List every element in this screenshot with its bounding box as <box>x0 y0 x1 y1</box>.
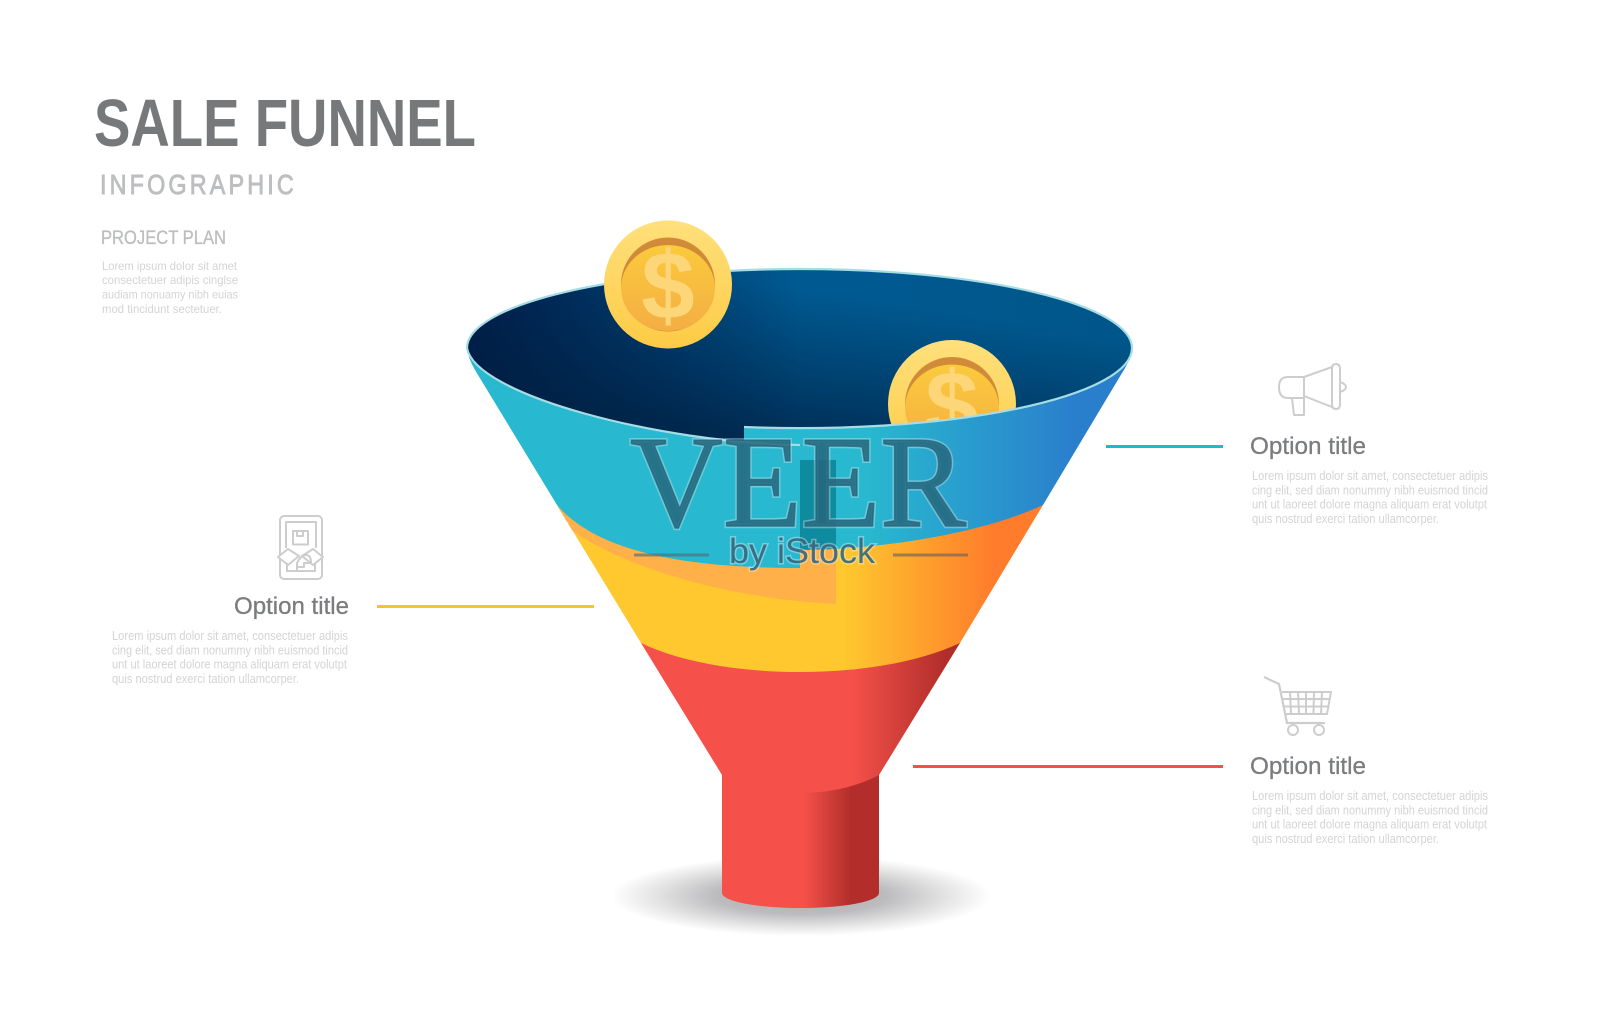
option block: left <box>112 593 349 686</box>
option body: quis nostrud exerci tation ullamcorper. <box>1252 832 1439 846</box>
icon: shopping cart <box>1264 677 1331 735</box>
option body <box>112 629 348 686</box>
option body: unt ut laoreet dolore magna aliquam erat volutpt <box>1252 498 1487 512</box>
funnel blue section left <box>467 348 800 568</box>
funnel blue section right <box>744 348 1132 550</box>
option block: bottom right <box>1250 753 1488 846</box>
funnel neck <box>722 775 879 908</box>
icon: coin above funnel: $ <box>641 232 695 340</box>
funnel interior <box>467 269 1132 445</box>
option body: Lorem ipsum dolor sit amet, consectetuer adipis <box>112 629 348 643</box>
watermark wordmark: VEER <box>630 410 967 555</box>
funnel <box>467 269 1132 908</box>
text block: project plan <box>101 227 238 316</box>
watermark <box>630 410 968 571</box>
subtitle: INFOGRAPHIC <box>100 170 294 200</box>
watermark wordmark: VEER <box>630 410 967 555</box>
funnel yellow section <box>557 505 1043 672</box>
project plan body <box>102 259 238 316</box>
option body: quis nostrud exerci tation ullamcorper. <box>112 672 299 686</box>
connector line: red <box>913 765 1223 768</box>
option block: top right <box>1250 433 1488 526</box>
option body: cing elit, sed diam nonummy nibh euismod tincid <box>1252 804 1488 818</box>
project plan body: mod tincidunt sectetuer. <box>102 302 222 316</box>
option body: Lorem ipsum dolor sit amet, consectetuer adipis <box>1252 469 1488 483</box>
project plan body: audiam nonuamy nibh euias <box>102 288 238 302</box>
project plan body: consectetuer adipis cinglse <box>102 273 238 287</box>
option body <box>1252 789 1488 846</box>
icon: coin falling inside funnel <box>888 340 1016 468</box>
option body: quis nostrud exerci tation ullamcorper. <box>1252 512 1439 526</box>
icon: coin falling inside funnel: $ <box>925 352 979 459</box>
icon: coin above funnel <box>604 220 732 348</box>
connector line: yellow <box>377 605 594 608</box>
funnel red section <box>641 643 960 793</box>
connector line: teal <box>1106 445 1223 448</box>
option body: cing elit, sed diam nonummy nibh euismod tincid <box>112 644 348 658</box>
watermark byline: by iStock <box>729 532 876 571</box>
funnel rim <box>467 269 1132 445</box>
funnel fold shadow <box>800 460 836 550</box>
option body: Lorem ipsum dolor sit amet, consectetuer adipis <box>1252 789 1488 803</box>
option body <box>1252 469 1488 526</box>
option title: Option title <box>234 593 349 620</box>
project plan heading: PROJECT PLAN <box>101 227 226 249</box>
title: SALE FUNNEL <box>94 86 476 161</box>
orange fold on yellow section <box>558 507 836 604</box>
watermark byline: by iStock <box>729 532 876 571</box>
project plan body: Lorem ipsum dolor sit amet <box>102 259 238 273</box>
icon: phone with open box <box>278 516 323 579</box>
option body: cing elit, sed diam nonummy nibh euismod tincid <box>1252 484 1488 498</box>
icon: megaphone <box>1279 364 1346 415</box>
option title: Option title <box>1250 433 1366 460</box>
funnel ground shadow <box>611 856 991 936</box>
option body: unt ut laoreet dolore magna aliquam erat volutpt <box>1252 818 1487 832</box>
option body: unt ut laoreet dolore magna aliquam erat volutpt <box>112 658 347 672</box>
option title: Option title <box>1250 753 1366 780</box>
